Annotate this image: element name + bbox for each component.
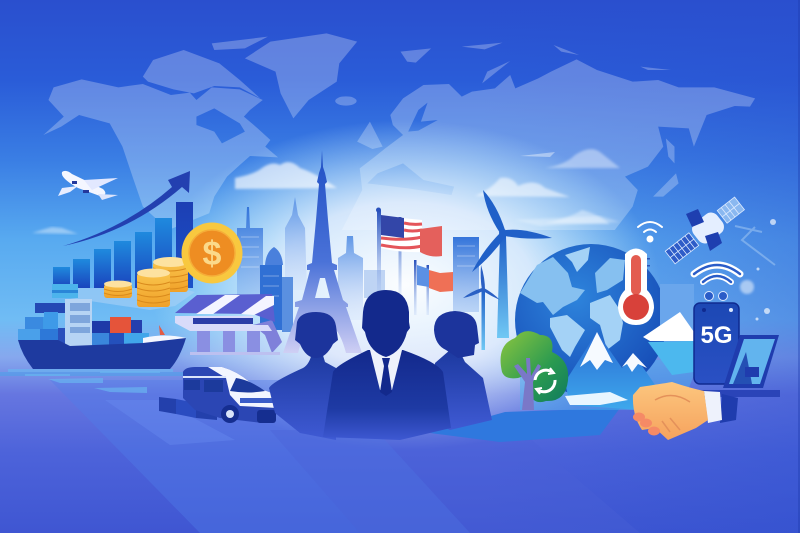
wifi signal [694, 265, 740, 282]
american flag [381, 215, 442, 256]
satellite body [689, 209, 727, 247]
dark right edge [798, 0, 800, 533]
small blue flag [417, 265, 429, 287]
satellite [663, 194, 747, 267]
van with cargo [159, 367, 277, 423]
van body [183, 367, 277, 423]
stack 2 [137, 268, 170, 307]
right person silhouette [430, 311, 492, 430]
container ship [18, 284, 186, 369]
stack 1 [104, 280, 132, 298]
wind turbines [463, 190, 552, 350]
faint satellite dish [735, 226, 775, 265]
bar chart with growth arrow [53, 171, 193, 288]
growth arrow [63, 171, 190, 246]
thermometer [618, 248, 654, 325]
van windows [184, 378, 265, 392]
flags [376, 208, 453, 315]
globe [515, 244, 667, 396]
flag poles [376, 208, 429, 315]
water streaks [8, 369, 173, 393]
ship mast [159, 325, 165, 335]
mountains [565, 332, 660, 410]
iceberg [643, 284, 694, 375]
tree trunk [514, 358, 541, 410]
world map [43, 33, 755, 230]
coin stacks [104, 257, 188, 307]
cargo pallets [159, 397, 217, 420]
solar panels [665, 197, 744, 264]
ship hull [18, 338, 186, 369]
stall awning [175, 294, 275, 322]
sleeve [720, 394, 738, 423]
van wheels [221, 405, 276, 423]
phone with 5G [694, 265, 740, 384]
globe continents [520, 247, 625, 357]
sparkles [740, 219, 776, 320]
eiffel tower [283, 150, 362, 353]
ground bands [0, 360, 700, 533]
dollar coin [182, 222, 242, 284]
center person silhouette [323, 290, 451, 440]
airplane [58, 171, 118, 200]
laptop [685, 335, 780, 397]
recycle icon [535, 368, 555, 394]
containers [18, 284, 149, 347]
shirt and tie [370, 350, 402, 396]
stall counter [175, 316, 272, 331]
handshake [633, 382, 738, 440]
hands [633, 382, 708, 440]
stall pillars [197, 320, 282, 353]
market stall [175, 294, 282, 355]
tree with recycle symbol [501, 331, 568, 410]
tree canopy [501, 331, 568, 402]
small wifi signal [638, 222, 662, 242]
bars [53, 202, 193, 288]
shadow under coins [70, 288, 195, 310]
left person silhouette [269, 312, 338, 440]
phone with 5G: 5G [700, 322, 733, 349]
head [362, 290, 410, 357]
dollar coin: $ [203, 235, 222, 273]
city skyline [237, 197, 479, 332]
stack 3 [153, 257, 188, 292]
large turbine [472, 190, 552, 338]
small turbine [463, 265, 500, 350]
ice shore [565, 392, 628, 405]
clouds [32, 149, 620, 234]
small red flag [429, 270, 453, 292]
ship deck [143, 336, 186, 350]
central glow [150, 120, 660, 450]
